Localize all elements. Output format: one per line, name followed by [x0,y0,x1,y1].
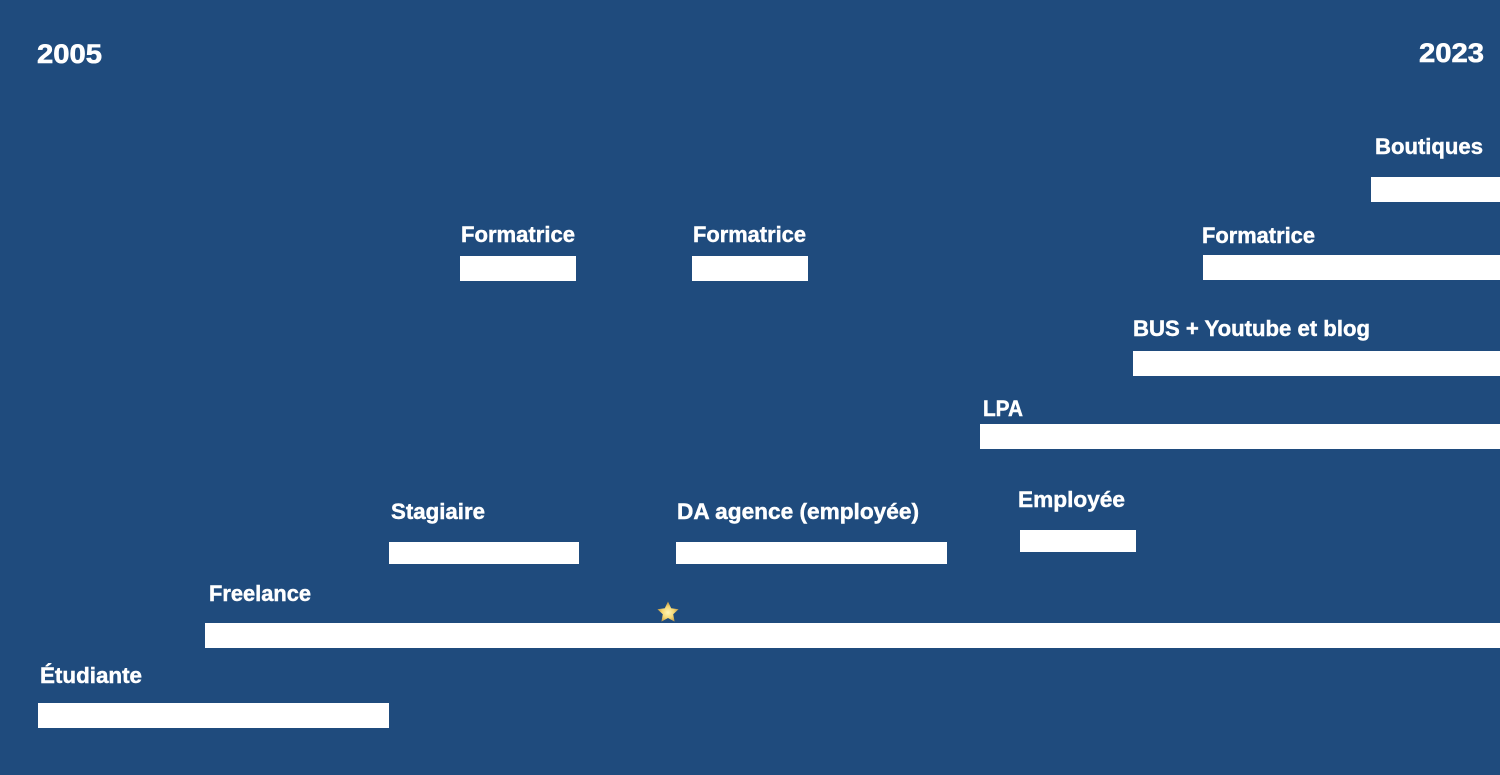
year label: 2023: 2023 [1419,38,1484,68]
timeline item: Étudiante: Étudiante [40,663,142,688]
timeline item: Formatrice (second) [692,222,808,281]
timeline item: Freelance: Freelance [209,581,311,606]
timeline item: Stagiaire: Stagiaire [391,499,485,524]
timeline item: Boutiques [1371,134,1500,202]
timeline item: Employée (second): Employée [1018,487,1125,512]
timeline item: Boutiques: Boutiques [1375,134,1483,159]
timeline item: Formatrice (first): Formatrice [461,222,575,247]
year label: 2005: 2005 [37,39,102,69]
timeline item: Formatrice (third) [1202,223,1500,280]
timeline item: Formatrice (third): Formatrice [1202,223,1315,248]
timeline item: DA agence (employée) [676,499,947,564]
icon: star [657,602,679,622]
timeline item: Freelance [205,581,1500,648]
timeline item: Stagiaire [389,499,579,564]
timeline item: Formatrice (second): Formatrice [693,222,806,247]
timeline item: DA agence (employée): DA agence (employée) [677,499,919,524]
timeline item: LPA: LPA [983,396,1023,421]
timeline item: BUS + Youtube et blog: BUS + Youtube et blog [1133,316,1370,341]
timeline item: Employée (second) [1018,487,1136,552]
timeline item: Étudiante [38,663,389,728]
timeline item: LPA [980,396,1500,449]
timeline item: BUS + Youtube et blog [1133,316,1500,376]
timeline item: Formatrice (first) [460,222,576,281]
